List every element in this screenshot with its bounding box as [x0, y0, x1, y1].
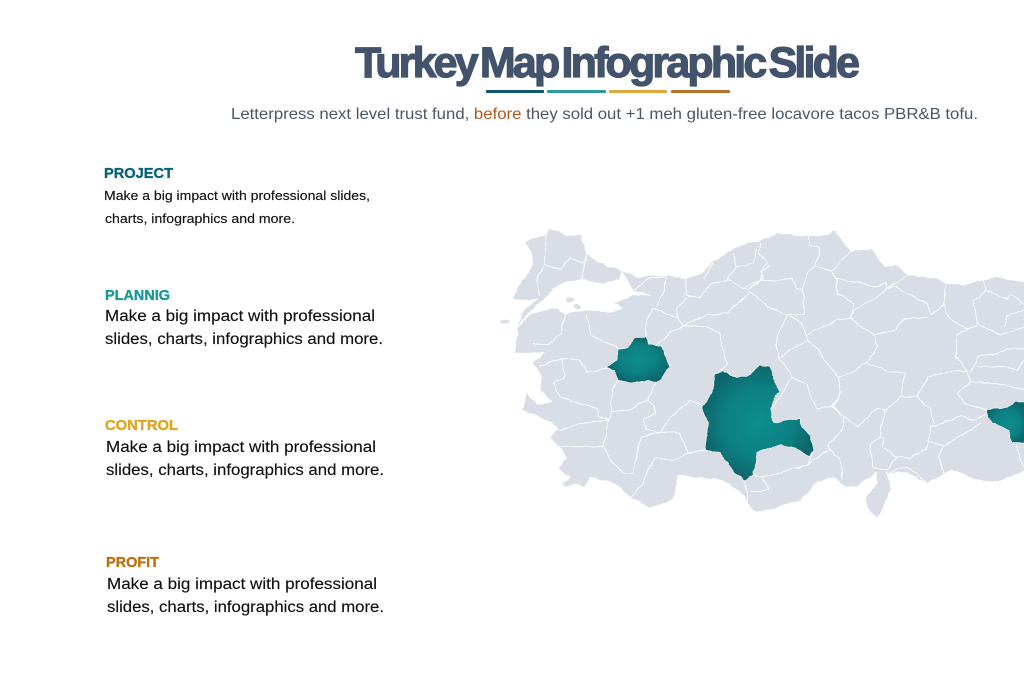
map: highlighted province Kutahya area: [607, 337, 670, 383]
map: Thrace landmass: [513, 229, 622, 327]
map: province borders west: [533, 233, 770, 510]
text block: project: Make a big impact with professional slides,: [104, 188, 370, 203]
text block: profit: slides, charts, infographics and more.: [107, 599, 384, 616]
text block: project: charts, infographics and more.: [105, 211, 295, 226]
text block: control: Make a big impact with professional: [106, 439, 376, 456]
text block: control: slides, charts, infographics and more.: [106, 462, 384, 479]
subtitle: Letterpress next level trust fund, before they sold out +1 meh gluten-free locavore tacos PBR&B tofu.: [231, 106, 978, 123]
text block: control: [105, 417, 384, 479]
text block: planning: slides, charts, infographics and more.: [105, 331, 383, 348]
title: Turkey Map Infographic Slide: [355, 39, 860, 87]
text block: planning: PLANNIG: [105, 287, 170, 304]
text block: project: PROJECT: [104, 165, 173, 182]
text block: control: CONTROL: [105, 417, 178, 434]
text block: planning: Make a big impact with professional: [105, 308, 375, 325]
text block: project: [104, 165, 370, 226]
text block: profit: Make a big impact with professional: [107, 576, 377, 593]
text block: profit: [106, 554, 384, 616]
map: province borders east: [744, 237, 1024, 492]
text block: profit: PROFIT: [106, 554, 159, 571]
map of Turkey: [500, 229, 1024, 518]
map: Anatolia landmass: [515, 230, 1024, 518]
map: highlighted province east edge: [986, 402, 1024, 443]
title underline bars: [486, 90, 730, 93]
text block: planning: [105, 287, 383, 348]
map: small islands: [500, 298, 581, 486]
map: highlighted province Konya area: [702, 365, 814, 480]
